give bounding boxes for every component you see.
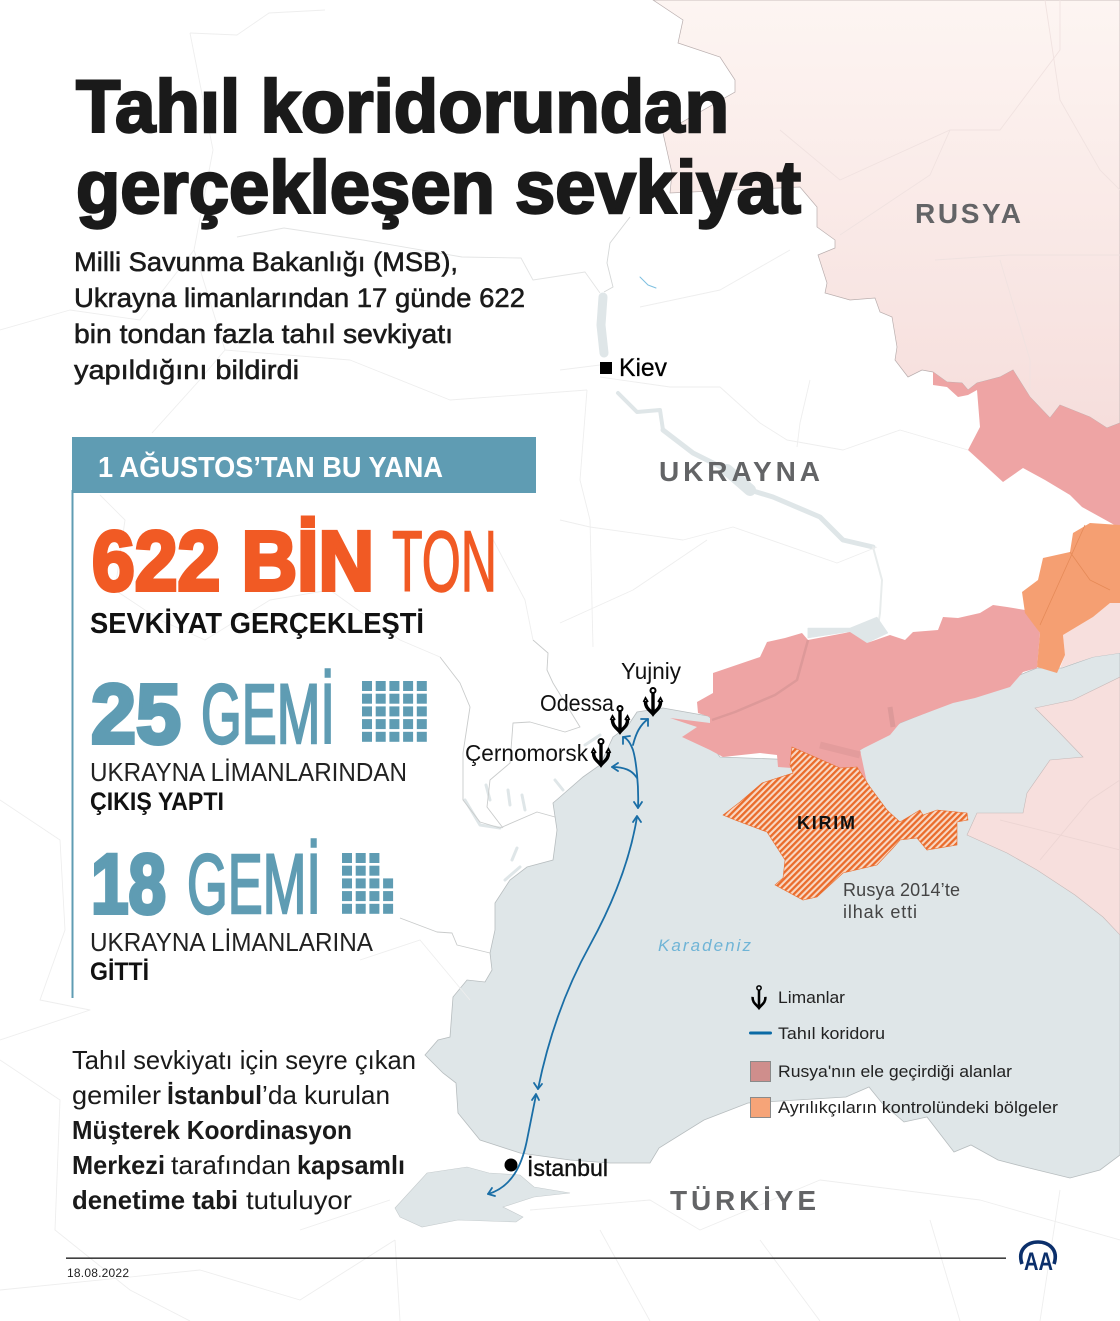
legend: ports [753, 986, 845, 1008]
Crimea note [843, 880, 960, 922]
footer [66, 1242, 1055, 1280]
subtitle: Milli Savunma Bakanlığı (MSB), [74, 247, 458, 277]
stat: 18 gemi: GEMİ [187, 837, 321, 931]
caption bold: ÇIKIŞ YAPTI [90, 788, 224, 816]
legend: ports: Limanlar [778, 988, 845, 1007]
text block: inspection note: denetime tabi [72, 1185, 238, 1215]
map: borders and roads [237, 217, 630, 953]
icon: anchor [592, 739, 610, 765]
country labels [659, 198, 1021, 1216]
title [76, 65, 801, 229]
text block: inspection note: Tahıl sevkiyatı için seyre çıkan [72, 1045, 416, 1075]
text block: inspection note: kapsamlı [297, 1150, 405, 1180]
logo: AA: AA [1024, 1248, 1053, 1276]
text block: inspection note: gemiler [72, 1080, 161, 1110]
title: gerçekleşen sevkiyat [76, 146, 801, 229]
port: Odessa: Odessa [540, 690, 614, 716]
map: Russia east of separatist area [1060, 603, 1120, 668]
title: Tahıl koridorundan [76, 65, 729, 148]
legend: corridor: Tahıl koridoru [778, 1024, 885, 1043]
country labels: UKRAYNA [659, 456, 820, 487]
text block: inspection note [72, 1045, 416, 1215]
caption bold: GİTTİ [90, 958, 149, 986]
icon: 25 ships grid [362, 681, 427, 742]
map: occupied area south [670, 605, 1040, 783]
panel left rule [72, 490, 74, 998]
map: faint Russian roads [780, 0, 1120, 860]
subtitle [74, 247, 525, 385]
stat: 25 gemi [90, 667, 427, 816]
logo: AA [1021, 1242, 1055, 1276]
map: Crimea [723, 747, 968, 900]
map: Black Sea and Azov [425, 653, 1120, 1178]
map: occupied river marks [712, 525, 1110, 755]
port: Odessa [540, 690, 630, 732]
Kiev marker: Kiev [619, 354, 667, 382]
date: 18.08.2022 [67, 1266, 129, 1280]
map: separatist area [1022, 523, 1120, 673]
text block: inspection note: Müşterek Koordinasyon [72, 1115, 352, 1145]
port: Yujniy [621, 658, 681, 714]
country labels: TÜRKİYE [670, 1185, 816, 1216]
subtitle: bin tondan fazla tahıl sevkiyatı [74, 319, 453, 349]
legend: occupied areas: Rusya'nın ele geçirdiği alanlar [778, 1062, 1012, 1081]
Crimea note: Rusya 2014’te [843, 880, 960, 900]
stat: 622 bin ton [90, 514, 497, 640]
icon: anchor [610, 706, 630, 732]
legend: separatist regions: Ayrılıkçıların kontrolündeki bölgeler [778, 1098, 1058, 1117]
map: Russia south [967, 677, 1120, 935]
subtitle: yapıldığını bildirdi [74, 355, 299, 385]
stats panel [72, 437, 536, 998]
legend [749, 986, 1058, 1118]
text block: inspection note: tutuluyor [246, 1185, 352, 1215]
text block: inspection note: tarafından [171, 1150, 291, 1180]
icon: anchor [644, 688, 662, 714]
text block: inspection note: İstanbul [167, 1080, 262, 1110]
stat: 622 bin ton: 622 BİN [92, 514, 374, 608]
grain corridor route [488, 719, 648, 1196]
text block: inspection note: ’da kurulan [262, 1080, 390, 1110]
panel heading [72, 437, 536, 493]
map: rivers and lakes [448, 277, 888, 1212]
stat: 18 gemi: 18 [91, 837, 166, 931]
map: occupied area north-east [933, 370, 1120, 528]
caption: UKRAYNA LİMANLARINA [90, 927, 374, 957]
Crimea note: ilhak etti [843, 902, 917, 922]
port: Yujniy: Yujniy [621, 658, 681, 684]
caption: UKRAYNA LİMANLARINDAN [90, 757, 407, 787]
panel heading: 1 AĞUSTOS’TAN BU YANA [98, 450, 443, 484]
stat: 25 gemi: GEMİ [201, 667, 335, 761]
sea label: Karadeniz [658, 936, 752, 955]
icon: 18 ships grid [342, 853, 393, 914]
stat: 25 gemi: 25 [91, 667, 181, 761]
country labels: RUSYA [915, 198, 1021, 229]
subtitle: Ukrayna limanlarından 17 günde 622 [74, 283, 525, 313]
map: Russia north [653, 0, 1120, 428]
stat: 622 bin ton: TON [392, 514, 497, 610]
Crimea label: KIRIM [797, 813, 855, 833]
stat: 18 gemi [90, 837, 393, 986]
Istanbul marker: İstanbul [527, 1155, 608, 1181]
map: Sea of Marmara [395, 1167, 570, 1227]
stat: 622 bin ton: SEVKİYAT GERÇEKLEŞTİ [90, 608, 424, 640]
text block: inspection note: Merkezi [72, 1150, 165, 1180]
port: Cernomorsk: Çernomorsk [465, 740, 588, 766]
